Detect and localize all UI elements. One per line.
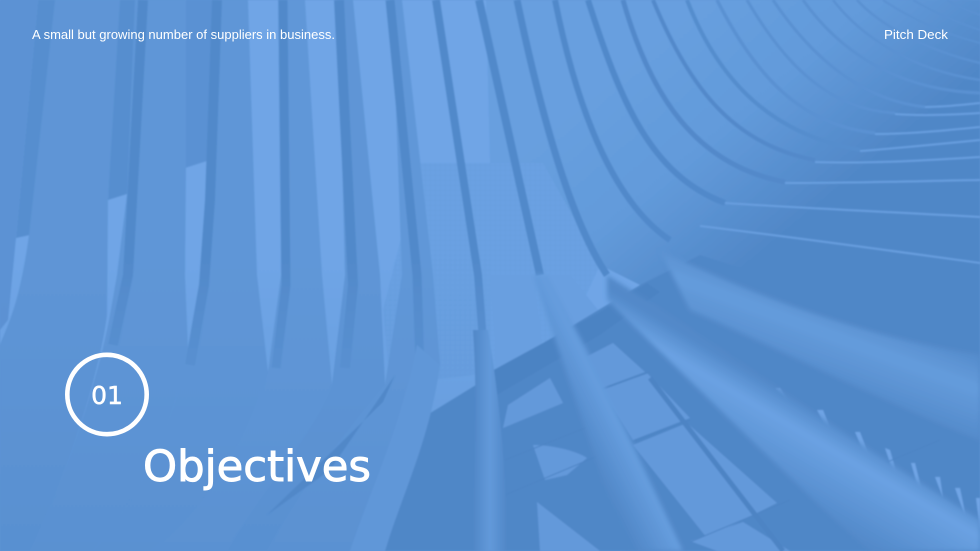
right curved ribs area (486, 0, 980, 385)
left facades and curved bands (0, 0, 440, 551)
number badge (67, 355, 147, 434)
title: Objectives (143, 442, 371, 492)
secondary curved pipe (350, 345, 440, 551)
header text: tagline: A small but growing number of suppliers in business. (32, 28, 335, 42)
light floor panels (490, 275, 790, 551)
building with window grid (383, 163, 600, 385)
cross beam (490, 283, 660, 395)
header text: pitch deck: Pitch Deck (884, 28, 949, 42)
left dark vertical strips (113, 0, 485, 368)
rib dark strips (479, 0, 980, 275)
far right light slits (775, 388, 980, 530)
left lower shade (0, 250, 490, 551)
panel seams (505, 372, 980, 551)
lower central structure (490, 255, 980, 551)
main pipes (473, 250, 980, 551)
rib light lines at right (700, 103, 980, 263)
number badge: 01 (91, 381, 123, 410)
